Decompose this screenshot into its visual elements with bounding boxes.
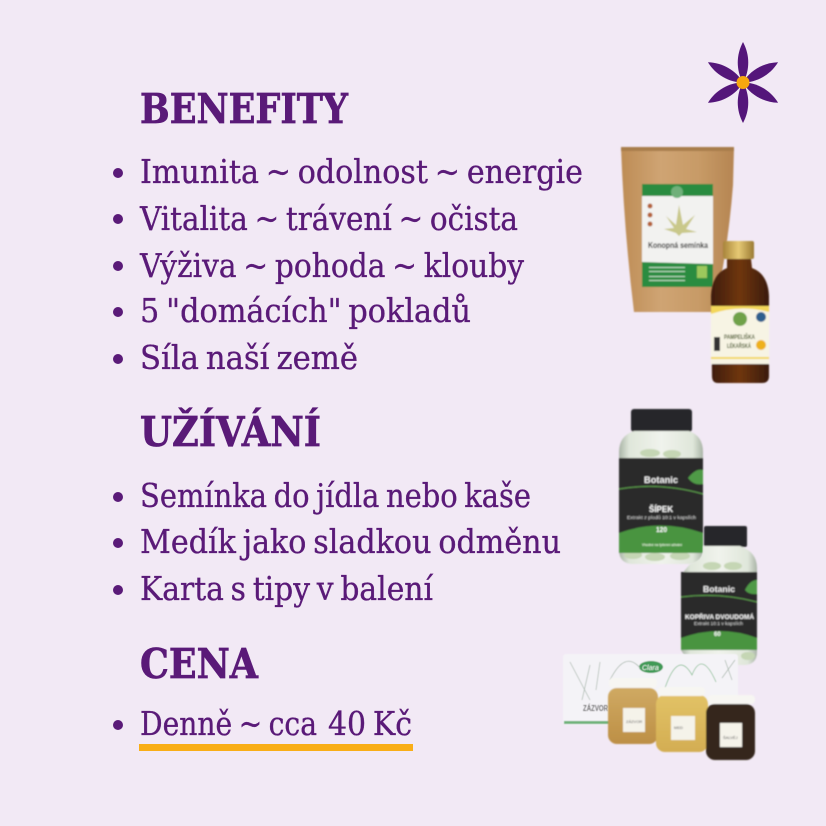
product: kopriva jar: 60	[714, 632, 721, 638]
list: usage: Karta s tipy v balení	[140, 569, 433, 608]
product: three honey jars	[608, 678, 755, 760]
product: three honey jars: MED	[674, 725, 683, 730]
product: hemp seed pouch	[621, 147, 734, 312]
list: benefits: Vitalita ~ trávení ~ očista	[139, 199, 518, 238]
product: sipek jar	[619, 409, 703, 564]
product: ginger honey box	[563, 654, 738, 725]
product: ginger honey box: ZÁZVOR	[583, 704, 608, 713]
product: hemp seed pouch: Konopná semínka	[648, 241, 708, 250]
icon: purple flower	[705, 42, 781, 123]
product: three honey jars: ŠALVĚJ	[723, 735, 738, 740]
list: benefits: Síla naší země	[140, 338, 358, 377]
product: sipek jar: Extrakt z plodů 10:1 v kapslích	[627, 514, 697, 520]
product: sipek jar: Botanic	[644, 475, 678, 485]
list: usage: Medík jako sladkou odměnu	[140, 522, 561, 561]
product: sipek jar: Vhodné na týdenní užívání	[642, 542, 683, 547]
list: benefits	[113, 152, 583, 377]
list: benefits: Imunita ~ odolnost ~ energie	[140, 152, 583, 191]
product: ginger honey box: Clara	[642, 665, 659, 672]
price line	[113, 704, 413, 751]
heading: benefity: BENEFITY	[140, 85, 349, 133]
heading: uzivani: UŽÍVÁNÍ	[140, 407, 321, 456]
product: kopriva jar: KOPŘIVA DVOUDOMÁ	[685, 613, 755, 621]
product: kopriva jar: Botanic	[703, 584, 735, 594]
list: benefits: Výživa ~ pohoda ~ klouby	[139, 246, 524, 285]
product: kopriva jar	[681, 526, 757, 665]
product: sipek jar: ŠÍPEK	[649, 503, 674, 514]
heading: cena: CENA	[140, 640, 259, 688]
product: dandelion bottle: PAMPELIŠKA	[724, 333, 756, 341]
price line: 40 Kč	[328, 704, 412, 743]
product: kopriva jar: Extrakt 10:1 v kapslích	[694, 621, 744, 626]
list: usage: Semínka do jídla nebo kaše	[140, 476, 531, 515]
list: usage	[113, 476, 561, 608]
product: sipek jar: 120	[656, 527, 667, 534]
product: three honey jars: ZÁZVOR	[626, 719, 642, 724]
price line: Denně ~ cca	[140, 704, 317, 743]
product: dandelion bottle: LÉKAŘSKÁ	[727, 342, 751, 350]
list: benefits: 5 "domácích" pokladů	[140, 291, 471, 330]
product: dandelion bottle	[711, 241, 769, 383]
